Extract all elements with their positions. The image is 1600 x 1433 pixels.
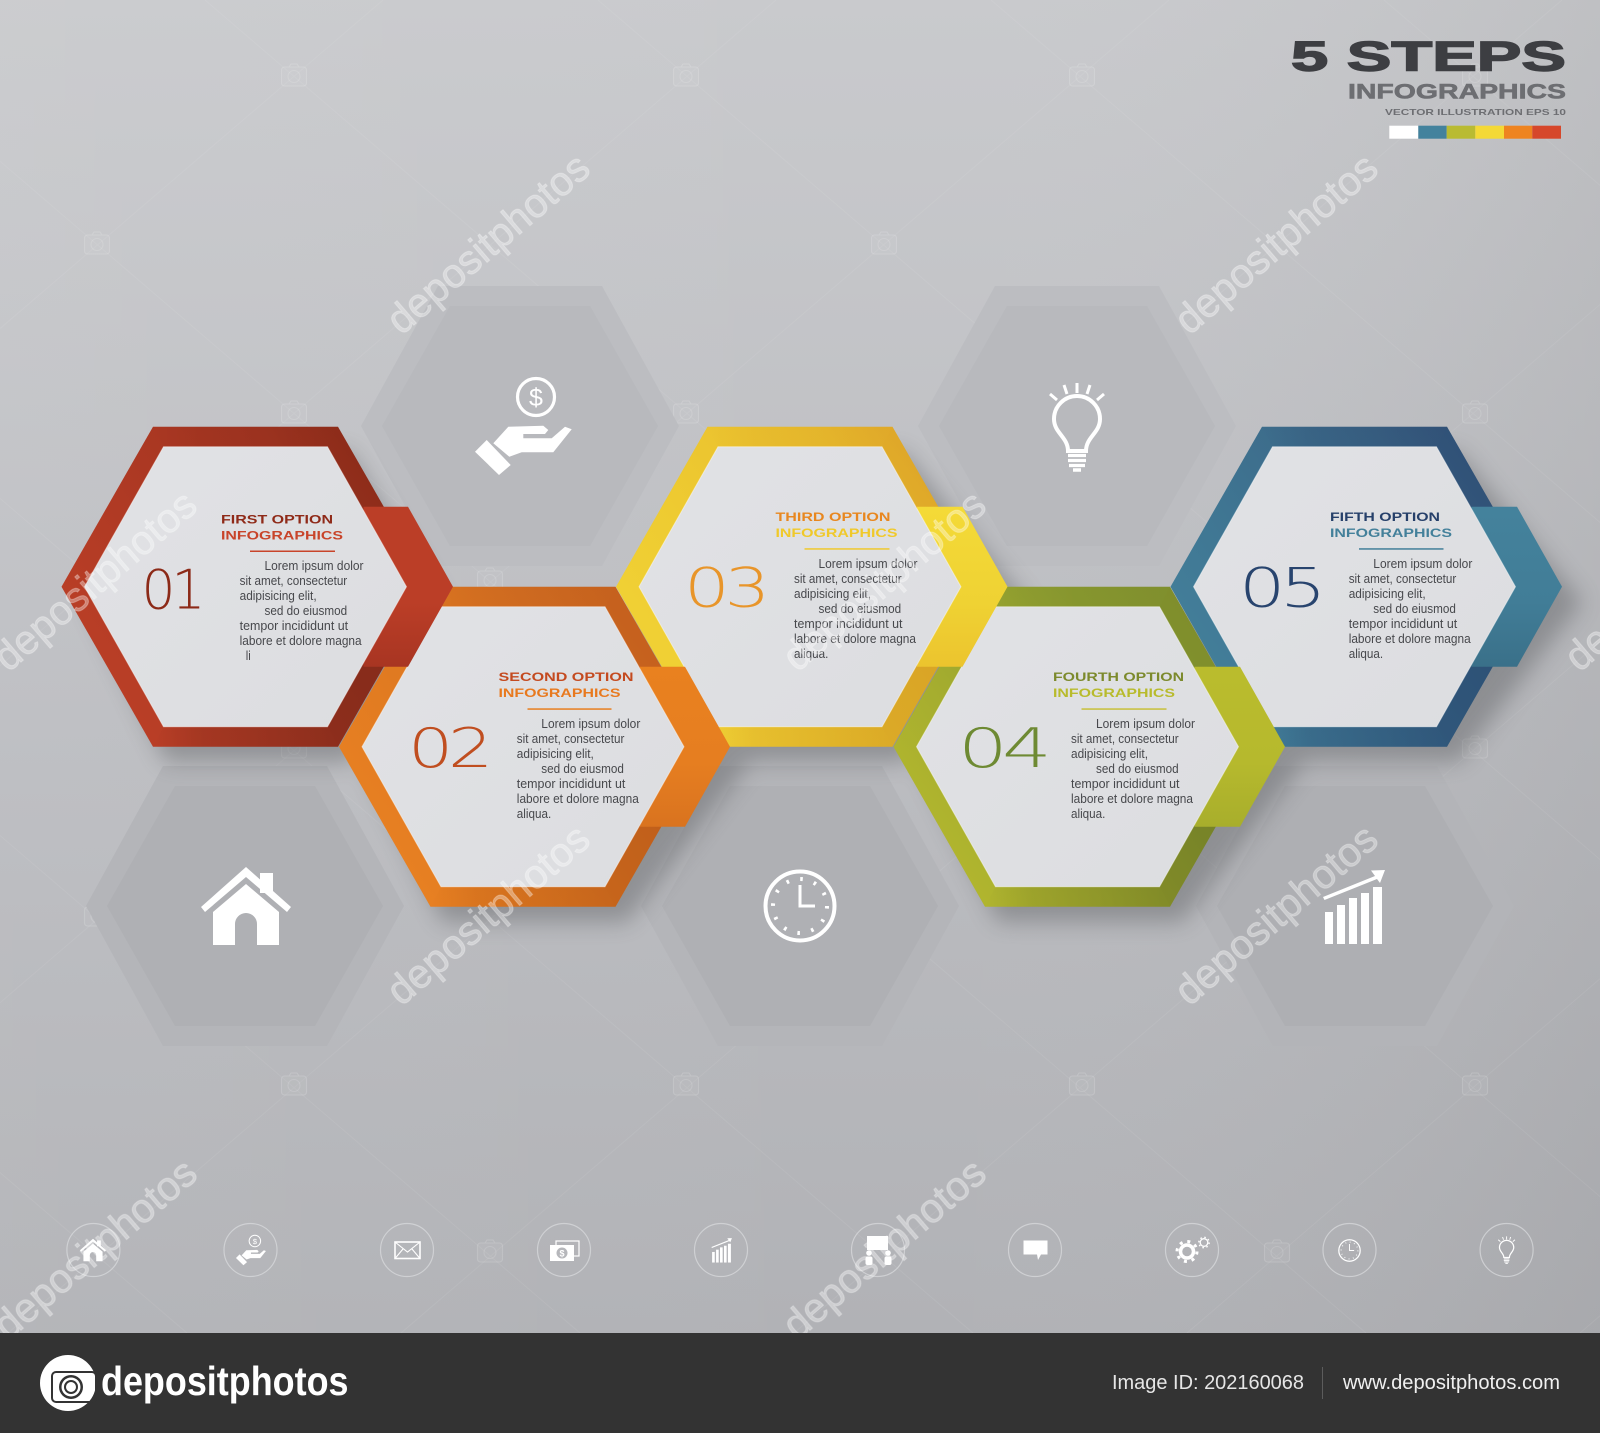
step 3 heading	[776, 510, 898, 540]
step 4 number: 04	[958, 717, 1047, 780]
step 4 heading: INFOGRAPHICS	[1053, 686, 1175, 700]
subtitle: infographics: INFOGRAPHICS	[1348, 80, 1566, 103]
large icon: clock	[766, 872, 834, 940]
step 2 frame	[339, 587, 707, 907]
background hexagons	[86, 286, 1514, 1046]
small icon: money	[538, 1224, 590, 1276]
small icon: speech bubble	[1008, 1224, 1062, 1276]
step 3 body text: aliqua.	[794, 646, 828, 661]
step 5 underline	[1359, 548, 1444, 550]
step 5 heading: FIFTH OPTION	[1330, 510, 1440, 524]
step 1 frame	[62, 427, 430, 747]
step 1 body text: tempor incididunt ut	[240, 618, 348, 633]
step 5 number: 05	[1239, 557, 1321, 620]
step 4 body text: aliqua.	[1071, 806, 1105, 821]
step 1 tab	[364, 507, 453, 667]
bottom icon row	[67, 1224, 1533, 1276]
large icon: light bulb	[1050, 383, 1104, 470]
hexagon backing: hand icon	[361, 286, 679, 566]
step 3 body text: adipisicing elit,	[794, 586, 871, 601]
step 4 body text: tempor incididunt ut	[1071, 776, 1180, 791]
step 5 body text: Lorem ipsum dolor	[1373, 556, 1473, 571]
step 4 body text	[1071, 716, 1196, 821]
step 2 body text: aliqua.	[517, 806, 551, 821]
step 4 card	[894, 587, 1285, 907]
step 5 frame	[1170, 427, 1538, 747]
step 1 body text: sit amet, consectetur	[240, 573, 348, 588]
step 1 body text: adipisicing elit,	[240, 588, 317, 603]
step 2 heading: SECOND OPTION	[498, 670, 634, 684]
step 3 heading: INFOGRAPHICS	[776, 526, 898, 540]
step 4 body text: sit amet, consectetur	[1071, 731, 1179, 746]
watermark cameras	[84, 64, 1488, 1262]
step 4 frame	[894, 587, 1262, 907]
step 5 body text: adipisicing elit,	[1349, 586, 1426, 601]
step 2 number: 02	[408, 717, 488, 780]
large icon: growth chart	[1323, 870, 1385, 944]
step 2 tab	[640, 667, 730, 827]
small icon: envelope	[380, 1224, 434, 1276]
step 2 heading: INFOGRAPHICS	[498, 686, 620, 700]
step 5 body text: aliqua.	[1349, 646, 1383, 661]
step 2 body text: tempor incididunt ut	[517, 776, 626, 791]
step 1 heading	[221, 512, 343, 542]
step 1 body text: sed do eiusmod	[264, 603, 347, 618]
step 1 body text: Lorem ipsum dolor	[264, 558, 364, 573]
hexagon backing: chart icon	[1196, 766, 1514, 1046]
step 1 card	[62, 427, 453, 747]
footer logo icon	[40, 1355, 96, 1411]
step 3 body text: tempor incididunt ut	[794, 616, 903, 631]
footer divider	[1322, 1367, 1323, 1399]
large icon: house	[201, 867, 291, 945]
step 2 body text: sed do eiusmod	[541, 761, 624, 776]
step 2 body text: adipisicing elit,	[517, 746, 594, 761]
step 4 inner panel	[916, 607, 1238, 887]
step 2 body text: sit amet, consectetur	[517, 731, 625, 746]
step 4 body text: adipisicing elit,	[1071, 746, 1148, 761]
hexagon backing: clock icon	[641, 766, 959, 1046]
step 4 tab	[1194, 667, 1285, 827]
step 2 body text	[517, 716, 641, 821]
step 2 heading	[498, 670, 634, 700]
step 4 body text: labore et dolore magna	[1071, 791, 1194, 806]
depositphotos watermarks: depositphotos	[377, 144, 599, 343]
step 3 tab	[917, 507, 1008, 667]
small icon: light bulb	[1480, 1224, 1533, 1276]
footer image id: Image ID: 202160068	[1112, 1372, 1304, 1394]
depositphotos watermarks: depositphotos	[773, 481, 995, 680]
footer bar	[0, 1333, 1600, 1433]
step 3 underline	[804, 548, 890, 550]
step 1 body text	[240, 558, 364, 663]
colour stripe	[1389, 126, 1561, 139]
step 2 card	[339, 587, 730, 907]
hexagon backing: house icon	[86, 766, 404, 1046]
step 5 heading: INFOGRAPHICS	[1330, 526, 1452, 540]
step 5 body text	[1349, 556, 1473, 661]
footer url: www.depositphotos.com	[1342, 1372, 1560, 1394]
step 3 body text	[794, 556, 918, 661]
step 3 number: 03	[684, 557, 765, 620]
step 3 frame	[616, 427, 984, 747]
step 5 body text: tempor incididunt ut	[1349, 616, 1458, 631]
large icon: hand with coin	[475, 378, 572, 475]
step 4 body text: sed do eiusmod	[1096, 761, 1179, 776]
step 3 heading: THIRD OPTION	[776, 510, 890, 524]
step 3 body text: labore et dolore magna	[794, 631, 917, 646]
footer logo wordmark: depositphotos	[101, 1358, 348, 1404]
step 5 card	[1170, 427, 1562, 747]
step 1 heading: FIRST OPTION	[221, 512, 333, 526]
depositphotos watermarks: depositphotos	[1165, 144, 1387, 343]
step 5 inner panel	[1194, 447, 1516, 727]
title block	[1291, 32, 1566, 139]
caption: vector illustration: VECTOR ILLUSTRATION EPS 10	[1385, 107, 1566, 117]
small icon: people chatting	[852, 1224, 904, 1276]
depositphotos watermarks: depositphotos	[773, 1149, 995, 1348]
step 2 body text: labore et dolore magna	[517, 791, 640, 806]
step 1 body text: li	[246, 648, 251, 663]
step 3 body text: Lorem ipsum dolor	[818, 556, 918, 571]
step 5 heading	[1330, 510, 1452, 540]
hexagon shadows	[88, 452, 1582, 922]
depositphotos watermarks: depositphotos	[377, 815, 599, 1014]
step 1 inner panel	[84, 447, 406, 727]
step 3 card	[616, 427, 1008, 747]
step 5 tab	[1472, 507, 1562, 667]
step 2 inner panel	[362, 607, 684, 887]
small icon: clock	[1323, 1224, 1376, 1276]
small icon: hand with coin	[224, 1224, 277, 1276]
small icon: gears	[1166, 1224, 1218, 1276]
step 3 body text: sit amet, consectetur	[794, 571, 902, 586]
depositphotos watermarks: depositphotos	[1165, 815, 1387, 1014]
step 1 underline	[250, 550, 335, 552]
step 4 heading	[1053, 670, 1184, 700]
step 4 heading: FOURTH OPTION	[1053, 670, 1184, 684]
small icon: chart	[694, 1224, 748, 1276]
step 1 number: 01	[142, 559, 202, 622]
step 5 body text: sit amet, consectetur	[1349, 571, 1457, 586]
small icon: money: $	[559, 1248, 565, 1258]
step 1 heading: INFOGRAPHICS	[221, 528, 343, 542]
step 4 underline	[1082, 708, 1166, 710]
step 5 body text: labore et dolore magna	[1349, 631, 1471, 646]
step 2 underline	[528, 708, 612, 710]
small icon: house	[67, 1224, 120, 1276]
step 5 body text: sed do eiusmod	[1373, 601, 1456, 616]
step 4 body text: Lorem ipsum dolor	[1096, 716, 1196, 731]
hexagon backing: bulb icon	[918, 286, 1236, 566]
step 1 body text: labore et dolore magna	[240, 633, 362, 648]
title: 5 steps: 5 STEPS	[1291, 32, 1566, 79]
step 2 body text: Lorem ipsum dolor	[541, 716, 641, 731]
step 3 inner panel	[639, 447, 961, 727]
step 3 body text: sed do eiusmod	[818, 601, 901, 616]
